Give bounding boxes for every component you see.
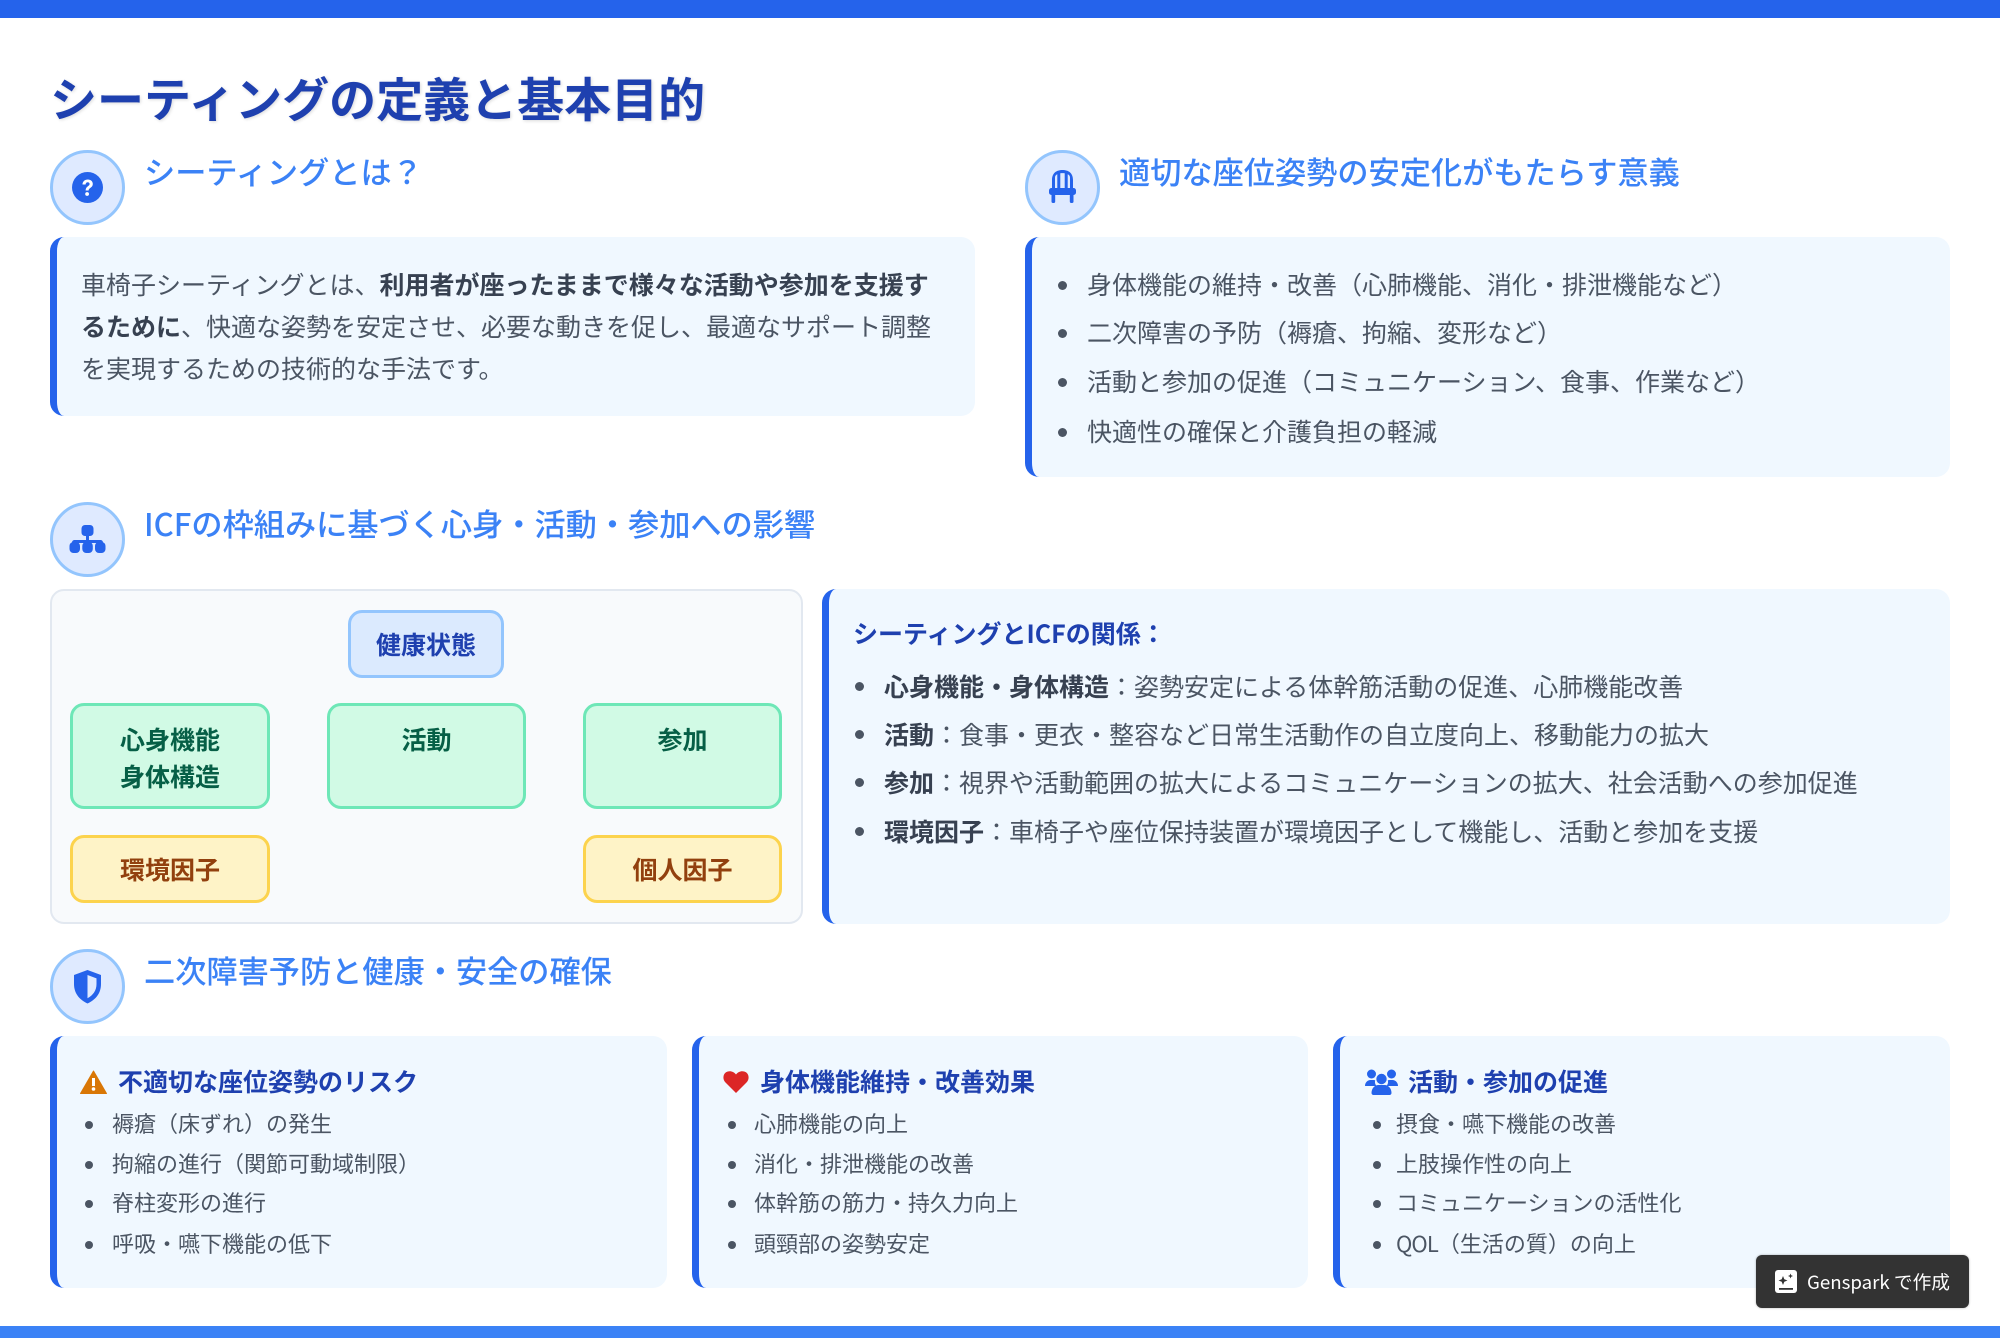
panel: ICF diagram — [50, 589, 803, 924]
badge: Genspark — [1756, 1255, 1969, 1308]
item: 体幹筋の筋力・持久力向上 — [754, 1186, 1018, 1218]
definition text: を実現するための技術的な手法です。 — [81, 350, 504, 386]
item: 拘縮の進行（関節可動域制限） — [112, 1147, 420, 1179]
bullet — [728, 1200, 736, 1208]
title: シーティングの定義と基本目的 — [50, 62, 705, 131]
icon: chair — [1025, 150, 1100, 225]
item: activity: 活動：食事・更衣・整容など日常生活動作の自立度向上、移動能力の拡大 — [884, 716, 1709, 752]
bullet — [728, 1121, 736, 1129]
bullet — [85, 1241, 93, 1249]
top bar — [0, 0, 2000, 18]
item: 呼吸・嚥下機能の低下 — [112, 1227, 332, 1259]
badge text: Genspark で作成 — [1807, 1268, 1950, 1295]
panel: activity promotion — [1333, 1036, 1950, 1288]
bullet — [85, 1121, 93, 1129]
icon: users — [1365, 1070, 1398, 1095]
panel: function effects — [692, 1036, 1308, 1288]
item: 上肢操作性の向上 — [1396, 1147, 1572, 1179]
item: 頭頸部の姿勢安定 — [754, 1227, 930, 1259]
list item 1: 身体機能の維持・改善（心肺機能、消化・排泄機能など） — [1087, 266, 1737, 302]
icon: sitemap — [50, 502, 125, 577]
bullet — [85, 1200, 93, 1208]
panel: significance list — [1025, 237, 1950, 477]
panel: ICF relation — [822, 589, 1950, 924]
bullet — [1058, 329, 1067, 338]
heading: ICF: ICFの枠組みに基づく心身・活動・参加への影響 — [144, 500, 815, 545]
bullet — [728, 1161, 736, 1169]
relation heading: シーティングとICFの関係： — [853, 615, 1166, 651]
node: activity: 活動 — [401, 721, 452, 757]
item: environment: 環境因子：車椅子や座位保持装置が環境因子として機能し、活動と参加を支援 — [884, 813, 1758, 849]
bottom bar — [0, 1326, 2000, 1338]
heading: what is seating: シーティングとは？ — [144, 148, 423, 193]
node: body functions: 身体構造 — [120, 758, 220, 794]
item: コミュニケーションの活性化 — [1396, 1186, 1682, 1218]
heading: significance: 適切な座位姿勢の安定化がもたらす意義 — [1119, 148, 1680, 193]
bullet — [1373, 1121, 1381, 1129]
node: health condition: 健康状態 — [376, 626, 476, 662]
panel: definition — [50, 237, 975, 416]
item: 褥瘡（床ずれ）の発生 — [112, 1107, 332, 1139]
icon: shield — [50, 949, 125, 1024]
bullet — [855, 827, 864, 836]
list item 3: 活動と参加の促進（コミュニケーション、食事、作業など） — [1087, 363, 1760, 399]
bullet — [1373, 1241, 1381, 1249]
card heading: 身体機能維持・改善効果 — [760, 1063, 1035, 1099]
item: 心肺機能の向上 — [754, 1107, 908, 1139]
bullet — [85, 1161, 93, 1169]
node: environmental factors: 環境因子 — [120, 851, 220, 887]
node: participation — [583, 703, 782, 809]
icon: spark — [1775, 1270, 1797, 1293]
item: QOL（生活の質）の向上 — [1396, 1227, 1636, 1259]
item: 摂食・嚥下機能の改善 — [1396, 1107, 1616, 1139]
node: environmental factors — [70, 835, 270, 903]
icon: warning — [80, 1070, 107, 1094]
definition text: るために、快適な姿勢を安定させ、必要な動きを促し、最適なサポート調整 — [81, 308, 931, 344]
icon: heart — [723, 1071, 749, 1093]
node: body functions: 心身機能 — [120, 721, 220, 757]
node: participation: 参加 — [657, 721, 708, 757]
bullet — [855, 682, 864, 691]
bullet — [728, 1241, 736, 1249]
icon: question — [50, 150, 125, 225]
bullet — [1373, 1200, 1381, 1208]
node: activity — [327, 703, 526, 809]
list item 2: 二次障害の予防（褥瘡、拘縮、変形など） — [1087, 314, 1562, 350]
node: personal factors — [583, 835, 782, 903]
card heading: 活動・参加の促進 — [1408, 1063, 1608, 1099]
item: 消化・排泄機能の改善 — [754, 1147, 974, 1179]
bullet — [1058, 428, 1067, 437]
list item 4: 快適性の確保と介護負担の軽減 — [1087, 413, 1437, 449]
item: body: 心身機能・身体構造：姿勢安定による体幹筋活動の促進、心肺機能改善 — [884, 668, 1683, 704]
panel: risks — [50, 1036, 667, 1288]
item: 脊柱変形の進行 — [112, 1186, 266, 1218]
bullet — [1058, 281, 1067, 290]
bullet — [1058, 378, 1067, 387]
definition text — [81, 266, 931, 386]
heading: prevention: 二次障害予防と健康・安全の確保 — [144, 947, 612, 992]
item: participation: 参加：視界や活動範囲の拡大によるコミュニケーションの拡大、社会活動への参加促進 — [884, 764, 1858, 800]
bullet — [855, 778, 864, 787]
bullet — [855, 730, 864, 739]
node: personal factors: 個人因子 — [632, 851, 732, 887]
card heading: 不適切な座位姿勢のリスク — [118, 1063, 418, 1099]
definition text: 車椅子シーティングとは、利用者が座ったままで様々な活動や参加を支援す — [81, 266, 929, 302]
node: health condition — [348, 610, 504, 678]
bullet — [1373, 1161, 1381, 1169]
node: body functions — [70, 703, 270, 809]
